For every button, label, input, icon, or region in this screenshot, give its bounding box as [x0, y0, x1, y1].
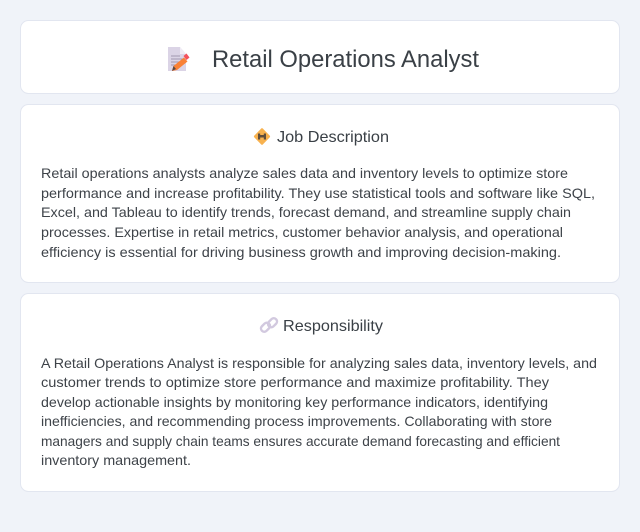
text: job description body: efficiency is essential for driving business growth and improving decision-making. — [41, 244, 561, 260]
title text: Retail Operations Analyst — [212, 46, 479, 73]
text: responsibility body: develop actionable insights by monitoring key performance indicators, identifying — [41, 394, 548, 410]
text: responsibility body: inefficiencies, and recommending process improvements. Collaborating with store — [41, 413, 552, 429]
text: responsibility body — [41, 355, 597, 468]
text: job description body: performance and increase profitability. They use statistical tools and software like SQL, — [41, 185, 595, 201]
text: responsibility body: inventory management. — [41, 452, 191, 468]
icon: document with pencil — [168, 47, 190, 71]
text: responsibility body: customer trends to optimize store performance and maximize profitability. They — [41, 374, 549, 390]
text: responsibility body: A Retail Operations Analyst is responsible for analyzing sales data, inventory levels, and — [41, 355, 597, 371]
panel: responsibility — [20, 294, 620, 492]
text: job description body: processes. Expertise in retail metrics, customer behavior analysis, and operational — [41, 224, 563, 240]
icon: road sign diamond — [255, 130, 269, 144]
text: job description body: Retail operations analysts analyze sales data and inventory levels to optimize store — [41, 165, 568, 181]
text: job description body — [41, 165, 595, 260]
text: job description body: Excel, and Tableau to identify trends, forecast demand, and streamline supply chain — [41, 204, 571, 220]
icon: chain link — [260, 317, 278, 333]
text: responsibility body: managers and supply chain teams ensures accurate demand forecasting and efficient — [41, 433, 560, 449]
heading: job description: Job Description — [277, 129, 389, 146]
panel: job description — [20, 104, 620, 282]
panel: title — [20, 20, 620, 94]
heading: responsibility: Responsibility — [283, 318, 383, 335]
